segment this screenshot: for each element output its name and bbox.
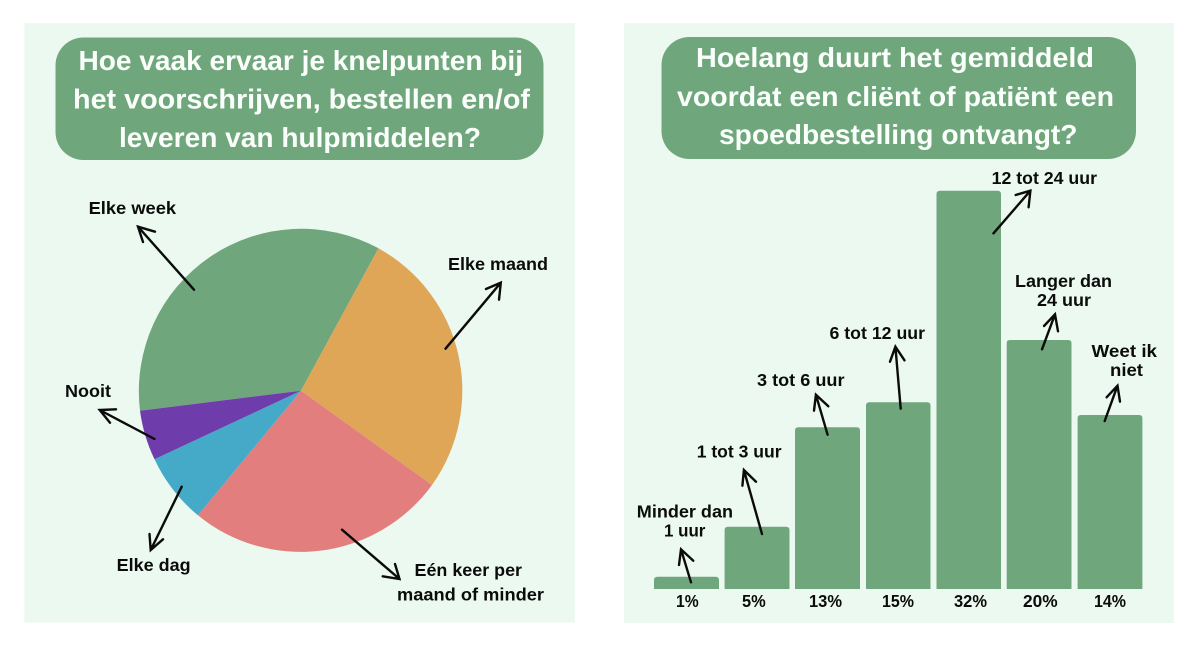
heading: delivery time question [662, 37, 1136, 159]
bar: Langer dan 24 uur: Langer dan [1015, 271, 1112, 291]
bar: 12 tot 24 uur: 32% [954, 591, 987, 611]
heading: delivery time question: voordat een cliënt of patiënt een [677, 81, 1114, 112]
bar: Minder dan 1 uur: Minder dan [637, 502, 733, 522]
bar: 1 tot 3 uur: 1 tot 3 uur [697, 442, 782, 462]
bar: Minder dan 1 uur [637, 502, 733, 611]
bar: Weet ik niet [1078, 341, 1157, 611]
heading: frequency question: het voorschrijven, bestellen en/of [73, 84, 531, 114]
bar: 1 tot 3 uur [697, 442, 790, 611]
bar: 3 tot 6 uur: 13% [809, 591, 842, 611]
callout: Nooit: Nooit [65, 381, 111, 401]
bar: Langer dan 24 uur [1007, 271, 1112, 611]
bar: Weet ik niet: Weet ik [1092, 341, 1157, 361]
bar: Minder dan 1 uur: 1 uur [664, 521, 706, 541]
callout: Elke dag: Elke dag [117, 555, 191, 575]
bar: 3 tot 6 uur [757, 370, 860, 611]
callout: Nooit [65, 381, 154, 439]
callout: Elke maand: Elke maand [448, 254, 548, 274]
panel: frequency pie chart [24, 23, 575, 622]
bar: Minder dan 1 uur: 1% [676, 591, 699, 611]
callout: Elke dag [117, 487, 191, 575]
heading: frequency question [56, 38, 544, 160]
bar: Weet ik niet: 14% [1094, 591, 1126, 611]
bar: 6 tot 12 uur: 15% [882, 591, 914, 611]
panel: delivery time bar chart [624, 23, 1174, 623]
heading: frequency question: Hoe vaak ervaar je knelpunten bij [78, 45, 523, 76]
pie chart [139, 229, 462, 552]
callout: Elke week [89, 198, 194, 290]
bar: 1 tot 3 uur: 5% [742, 591, 766, 611]
bar: 12 tot 24 uur: 12 tot 24 uur [992, 168, 1097, 188]
bar: 3 tot 6 uur: 3 tot 6 uur [757, 370, 845, 390]
bar: Weet ik niet: niet [1110, 360, 1143, 380]
heading: frequency question: leveren van hulpmiddelen? [119, 122, 481, 153]
bar: 6 tot 12 uur: 6 tot 12 uur [830, 323, 925, 343]
bar: 12 tot 24 uur [936, 168, 1097, 611]
callout: Eén keer per maand of minder: Eén keer per [414, 560, 522, 580]
callout: Eén keer per maand of minder: maand of minder [397, 585, 544, 605]
callout: Eén keer per maand of minder [342, 530, 544, 605]
bar: Langer dan 24 uur: 20% [1023, 591, 1058, 611]
callout: Elke week: Elke week [89, 198, 176, 218]
heading: delivery time question: spoedbestelling ontvangt? [719, 119, 1078, 150]
callout: Elke maand [446, 254, 548, 349]
bar: 6 tot 12 uur [830, 323, 930, 611]
bar: Langer dan 24 uur: 24 uur [1037, 290, 1091, 310]
heading: delivery time question: Hoelang duurt het gemiddeld [696, 42, 1094, 73]
